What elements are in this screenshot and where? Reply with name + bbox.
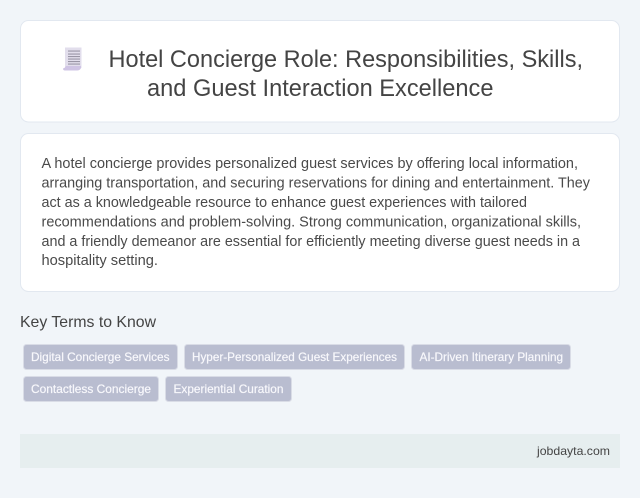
tag: ai-driven itinerary planning xyxy=(412,344,570,370)
tag: hyper-personalized guest experiences: Hyper-Personalized Guest Experiences xyxy=(192,350,397,364)
description text: arranging transportation, and securing reservations for dining and entertainment. They xyxy=(42,176,591,192)
tag: digital concierge services: Digital Concierge Services xyxy=(31,350,170,364)
description text: and a friendly demeanor are essential for efficiently meeting diverse guest needs in a xyxy=(42,234,580,250)
description text xyxy=(42,156,591,269)
description text: hospitality setting. xyxy=(42,253,158,269)
title: Hotel Concierge Role: Responsibilities, Skills, xyxy=(108,46,583,73)
footer source text: jobdayta.com xyxy=(536,444,610,458)
heading: key terms: Key Terms to Know xyxy=(20,314,156,331)
title: and Guest Interaction Excellence xyxy=(147,75,494,102)
tag list xyxy=(24,344,570,402)
tag: hyper-personalized guest experiences xyxy=(184,344,404,370)
footer bar xyxy=(20,434,620,468)
description text: A hotel concierge provides personalized guest services by offering local information, xyxy=(42,156,578,172)
tag: experiential curation xyxy=(166,376,292,402)
description text: recommendations and problem-solving. Strong communication, organizational skills, xyxy=(42,214,581,230)
tag: contactless concierge xyxy=(24,376,158,402)
icon: scroll document xyxy=(63,48,82,70)
tag: digital concierge services xyxy=(24,344,178,370)
tag: contactless concierge: Contactless Concierge xyxy=(31,382,151,396)
tag: experiential curation: Experiential Curation xyxy=(174,382,284,396)
panel: title card xyxy=(20,20,620,122)
title xyxy=(108,46,583,102)
panel: description card xyxy=(20,134,620,292)
description text: act as a knowledgeable resource to enhance guest experiences with tailored xyxy=(42,195,527,211)
tag: ai-driven itinerary planning: AI-Driven Itinerary Planning xyxy=(420,350,563,364)
